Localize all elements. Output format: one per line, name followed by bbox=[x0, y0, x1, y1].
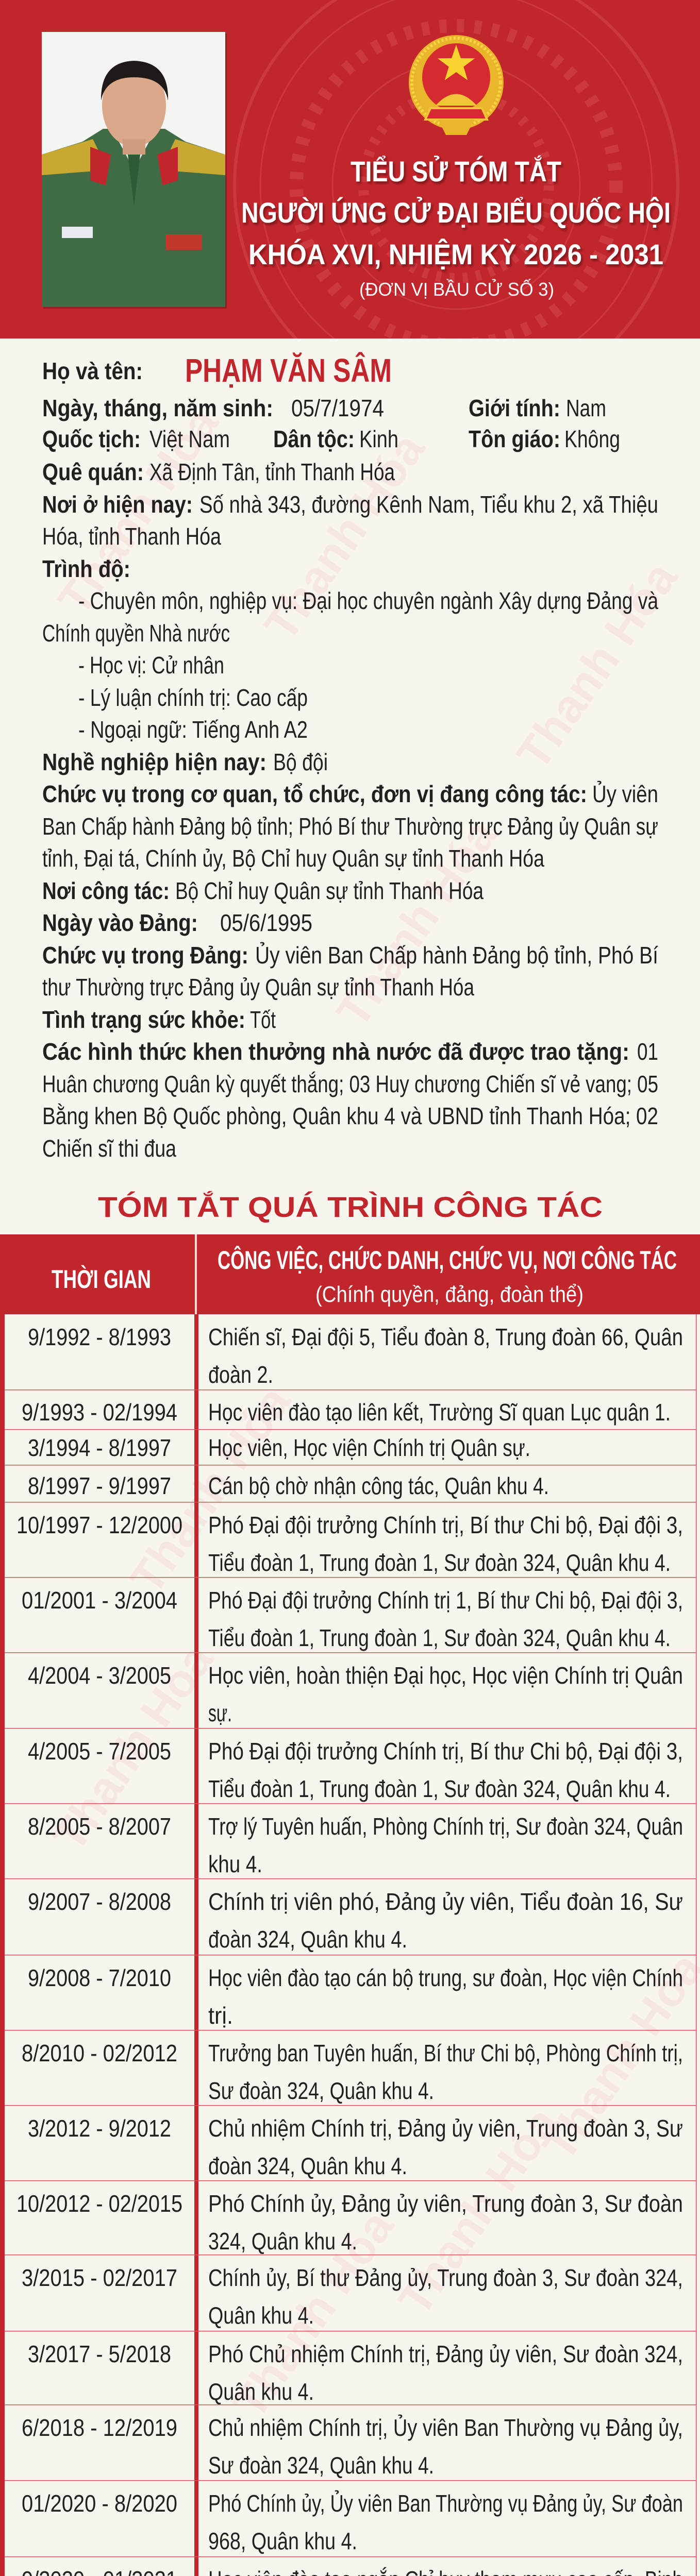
row 10: đoàn 324, Quân khu 4. bbox=[208, 1926, 407, 1953]
row 17 bbox=[22, 2414, 683, 2479]
row 14 bbox=[16, 2190, 683, 2255]
workplace: Bộ Chỉ huy Quân sự tỉnh Thanh Hóa bbox=[175, 877, 484, 904]
workplace: Nơi công tác: bbox=[42, 877, 170, 904]
row 7: sự. bbox=[208, 1700, 232, 1726]
row 4: 8/1997 - 9/1997 bbox=[28, 1472, 171, 1499]
education: Trình độ: bbox=[42, 555, 130, 582]
awards bbox=[42, 1038, 658, 1162]
row 1 bbox=[28, 1324, 683, 1388]
education: - Học vị: Cử nhân bbox=[78, 652, 224, 679]
watermarks: Thanh Hóa bbox=[48, 398, 229, 624]
row 16 bbox=[28, 2341, 683, 2405]
current position: Chức vụ trong cơ quan, tổ chức, đơn vị đang công tác: bbox=[42, 781, 587, 807]
education bbox=[42, 555, 658, 743]
row 9: 8/2005 - 8/2007 bbox=[28, 1813, 171, 1840]
table rows bbox=[16, 1324, 683, 2576]
row 3 bbox=[28, 1434, 530, 1461]
title block bbox=[241, 155, 671, 270]
row 4 bbox=[28, 1472, 549, 1499]
row 11 bbox=[28, 1964, 683, 2029]
birth date / gender row bbox=[42, 395, 606, 421]
row 4: Cán bộ chờ nhận công tác, Quân khu 4. bbox=[208, 1472, 549, 1499]
row 9: khu 4. bbox=[208, 1851, 262, 1877]
row 8 bbox=[28, 1738, 683, 1802]
party position bbox=[42, 942, 658, 1001]
row 1: 9/1992 - 8/1993 bbox=[28, 1324, 171, 1350]
party admission date: Ngày vào Đảng: bbox=[42, 909, 198, 936]
watermarks: Thanh Hóa bbox=[43, 1634, 224, 1860]
awards: 01 bbox=[637, 1038, 658, 1065]
party position: Chức vụ trong Đảng: bbox=[42, 942, 248, 969]
title block: KHÓA XVI, NHIỆM KỲ 2026 - 2031 bbox=[248, 238, 663, 270]
watermarks: Thanh Hóa bbox=[255, 423, 435, 650]
row 13: đoàn 324, Quân khu 4. bbox=[208, 2153, 407, 2179]
occupation: Nghề nghiệp hiện nay: bbox=[42, 749, 266, 775]
subtitle: electoral unit: (ĐƠN VỊ BẦU CỬ SỐ 3) bbox=[359, 278, 554, 300]
row 16: Quân khu 4. bbox=[208, 2378, 314, 2405]
education: - Lý luận chính trị: Cao cấp bbox=[78, 684, 308, 711]
row 3: Học viên, Học viện Chính trị Quân sự. bbox=[208, 1434, 530, 1461]
national emblem bbox=[409, 35, 504, 135]
row 10: 9/2007 - 8/2008 bbox=[28, 1888, 171, 1915]
birth date / gender row: Giới tính: bbox=[469, 395, 560, 421]
table header: THỜI GIAN bbox=[52, 1265, 151, 1294]
row 13 bbox=[28, 2115, 683, 2179]
row 7: 4/2004 - 3/2005 bbox=[28, 1662, 171, 1689]
education: Chính quyền Nhà nước bbox=[42, 620, 230, 647]
row 2: 9/1993 - 02/1994 bbox=[22, 1399, 177, 1426]
hometown: Quê quán: bbox=[42, 459, 144, 485]
awards: Chiến sĩ thi đua bbox=[42, 1135, 176, 1162]
health: Tình trạng sức khỏe: bbox=[42, 1006, 245, 1033]
residence: Nơi ở hiện nay: bbox=[42, 491, 193, 518]
nationality row: Việt Nam bbox=[149, 426, 230, 452]
row 6 bbox=[22, 1587, 683, 1651]
birth date / gender row: Nam bbox=[566, 395, 606, 421]
row 12: 8/2010 - 02/2012 bbox=[22, 2040, 177, 2066]
current position bbox=[42, 781, 658, 872]
row 14: 10/2012 - 02/2015 bbox=[16, 2190, 182, 2217]
row 5 bbox=[16, 1512, 683, 1576]
row 18: 01/2020 - 8/2020 bbox=[22, 2490, 177, 2517]
section heading: work history: TÓM TẮT QUÁ TRÌNH CÔNG TÁC bbox=[98, 1191, 603, 1223]
watermarks: Thanh Hóa bbox=[224, 2201, 404, 2427]
name row bbox=[42, 351, 392, 389]
title block: TIỂU SỬ TÓM TẮT bbox=[351, 155, 561, 188]
row 3: 3/1994 - 8/1997 bbox=[28, 1434, 171, 1461]
row 11: 9/2008 - 7/2010 bbox=[28, 1964, 171, 1991]
residence: Hóa, tỉnh Thanh Hóa bbox=[42, 523, 221, 550]
workplace bbox=[42, 877, 484, 904]
nationality row: Kinh bbox=[359, 426, 398, 452]
row 18 bbox=[22, 2490, 683, 2554]
nationality row bbox=[42, 426, 620, 452]
birth date / gender row: Ngày, tháng, năm sinh: bbox=[42, 395, 273, 421]
birth date / gender row: 05/7/1974 bbox=[291, 395, 384, 421]
party position: thư Thường trực Đảng ủy Quân sự tỉnh Thanh Hóa bbox=[42, 974, 474, 1001]
hometown: Xã Định Tân, tỉnh Thanh Hóa bbox=[149, 459, 395, 485]
row 9 bbox=[28, 1813, 683, 1877]
portrait photo bbox=[42, 32, 227, 309]
header background bbox=[0, 0, 700, 338]
row 17: Sư đoàn 324, Quân khu 4. bbox=[208, 2452, 434, 2479]
watermarks: Thanh Hóa bbox=[507, 552, 688, 778]
name row: PHẠM VĂN SÂM bbox=[185, 351, 392, 389]
personal info block bbox=[42, 351, 658, 1162]
row 14: 324, Quân khu 4. bbox=[208, 2228, 357, 2255]
nationality row: Quốc tịch: bbox=[42, 426, 141, 452]
row 15: Quân khu 4. bbox=[208, 2302, 314, 2329]
row 15: 3/2015 - 02/2017 bbox=[22, 2264, 177, 2291]
row 12 bbox=[22, 2040, 683, 2104]
row 12: Sư đoàn 324, Quân khu 4. bbox=[208, 2077, 434, 2104]
party admission date bbox=[42, 909, 312, 936]
residence bbox=[42, 491, 658, 550]
nationality row: Dân tộc: bbox=[273, 426, 355, 452]
hometown bbox=[42, 459, 395, 485]
current position: tỉnh, Đại tá, Chính ủy, Bộ Chỉ huy Quân sự tỉnh Thanh Hóa bbox=[42, 845, 544, 872]
party admission date: 05/6/1995 bbox=[220, 909, 312, 936]
row 10 bbox=[28, 1888, 683, 1953]
row 6: 01/2001 - 3/2004 bbox=[22, 1587, 177, 1614]
education: - Ngoại ngữ: Tiếng Anh A2 bbox=[78, 716, 308, 743]
row 16: 3/2017 - 5/2018 bbox=[28, 2341, 171, 2367]
row 11: trị. bbox=[208, 2002, 233, 2029]
name row: Họ và tên: bbox=[42, 358, 143, 384]
row 13: 3/2012 - 9/2012 bbox=[28, 2115, 171, 2142]
nationality row: Không bbox=[564, 426, 620, 452]
row 19 bbox=[22, 2566, 683, 2576]
health: Tốt bbox=[250, 1006, 276, 1033]
row 5: 10/1997 - 12/2000 bbox=[16, 1512, 182, 1538]
watermarks: Thanh Hóa bbox=[121, 1377, 301, 1603]
row 2 bbox=[22, 1399, 671, 1426]
row 17: 6/2018 - 12/2019 bbox=[22, 2414, 177, 2441]
awards: Các hình thức khen thưởng nhà nước đã được trao tặng: bbox=[42, 1038, 629, 1065]
row 1: đoàn 2. bbox=[208, 1361, 273, 1388]
nationality row: Tôn giáo: bbox=[469, 426, 560, 452]
occupation: Bộ đội bbox=[273, 749, 328, 775]
work history table bbox=[0, 1234, 700, 2576]
row 15 bbox=[22, 2264, 683, 2329]
current position: Ủy viên bbox=[592, 781, 658, 807]
table header: (Chính quyền, đảng, đoàn thể) bbox=[315, 1282, 584, 1307]
table body frame bbox=[0, 1314, 697, 2576]
row 18: 968, Quân khu 4. bbox=[208, 2528, 357, 2554]
table header bbox=[0, 1234, 700, 1314]
watermarks bbox=[43, 398, 700, 2427]
watermarks: Thanh Hóa bbox=[327, 810, 507, 1036]
row 7 bbox=[28, 1662, 683, 1726]
watermarks: Thanh Hóa bbox=[389, 2098, 569, 2324]
row 8: 4/2005 - 7/2005 bbox=[28, 1738, 171, 1765]
